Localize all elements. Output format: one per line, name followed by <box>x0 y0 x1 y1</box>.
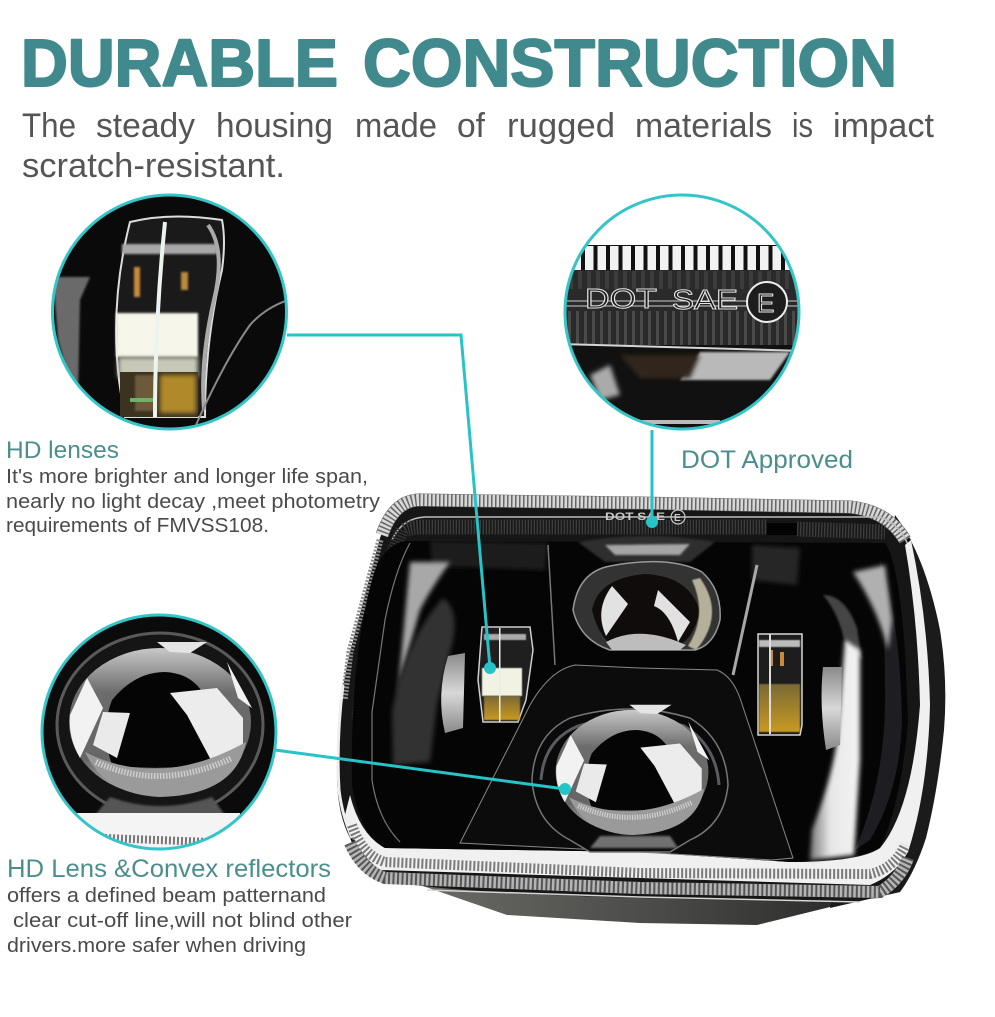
DOT SAE mark <box>605 510 685 524</box>
top mount <box>578 536 715 562</box>
right small prism <box>822 667 842 750</box>
front bezel <box>337 495 930 900</box>
text block: HD lenses <box>6 437 380 537</box>
text block: HD lenses: requirements of FMVSS108. <box>6 515 269 537</box>
circle: DOT SAE marking close-up <box>560 190 805 435</box>
left white edge <box>338 685 352 838</box>
circle: DOT SAE marking close-up: SAE <box>672 284 738 315</box>
subtitle: rugged <box>507 107 615 145</box>
text block: HD Lens & Convex reflectors: offers a defined beam patternand <box>7 885 326 907</box>
left gray reflection <box>397 562 450 700</box>
top fins base <box>382 500 905 540</box>
top lens <box>573 562 720 650</box>
title: CONSTRUCTION <box>363 26 897 101</box>
circle: HD lens prism close-up <box>50 190 290 435</box>
upper right reflection <box>853 565 892 650</box>
lower panel <box>460 665 793 860</box>
right large prism <box>758 634 802 735</box>
connector lines <box>275 335 652 789</box>
thin rim line <box>392 517 908 545</box>
top fins <box>382 500 905 540</box>
subtitle: steady <box>96 107 195 145</box>
label: DOT Approved: DOT Approved <box>681 446 853 474</box>
connector dots <box>484 516 658 795</box>
bottom band 2 <box>350 843 908 892</box>
text block: HD Lens & Convex reflectors: clear cut-off line,will not blind other <box>13 910 352 932</box>
subtitle: The <box>22 107 76 145</box>
right dark side panel <box>855 560 902 850</box>
left fins <box>344 540 380 700</box>
bottom ribs 1 <box>352 825 905 874</box>
bottom outline <box>427 890 860 902</box>
DOT SAE mark: DOT SAE <box>605 511 665 523</box>
notch <box>767 523 797 535</box>
subtitle: of <box>457 107 486 145</box>
title: DURABLE <box>21 26 338 101</box>
subtitle: materials <box>635 107 772 145</box>
ribbed top band <box>405 527 885 532</box>
rear housing, right <box>830 515 945 908</box>
subtitle <box>22 107 935 185</box>
bottom bright band and right stripe <box>345 540 930 885</box>
text block: HD Lens & Convex reflectors: drivers.more safer when driving <box>7 935 306 957</box>
DOT SAE mark: E <box>674 513 681 524</box>
title <box>21 26 897 101</box>
subtitle: impact <box>833 107 935 145</box>
headlight product photo <box>337 495 945 925</box>
circle: DOT SAE marking close-up: DOT <box>585 283 657 314</box>
interior reflector <box>352 541 908 862</box>
text block: HD lenses: HD lenses <box>6 437 119 464</box>
circle: convex lens close-up <box>38 610 278 860</box>
top gray patches <box>430 541 548 570</box>
text block: HD Lens & Convex reflectors: HD Lens &Convex reflectors <box>7 855 331 883</box>
white column reflection <box>810 640 860 860</box>
circle: DOT SAE marking close-up: E <box>757 288 774 318</box>
text block: HD lenses: nearly no light decay ,meet photometry <box>6 491 380 513</box>
inner left line <box>372 543 410 842</box>
text block: HD Lens & Convex reflectors <box>7 855 352 957</box>
subtitle: scratch-resistant. <box>22 147 285 185</box>
bottom lens <box>532 705 728 852</box>
subtitle: housing <box>216 107 333 145</box>
left small prism <box>441 653 465 733</box>
underside housing <box>420 880 900 925</box>
subtitle: made <box>355 107 437 145</box>
subtitle: is <box>792 107 813 145</box>
divider lines <box>548 545 555 665</box>
left ribbed band <box>358 530 402 720</box>
text block: HD lenses: It's more brighter and longer life span, <box>6 466 368 488</box>
left large prism <box>478 627 533 722</box>
